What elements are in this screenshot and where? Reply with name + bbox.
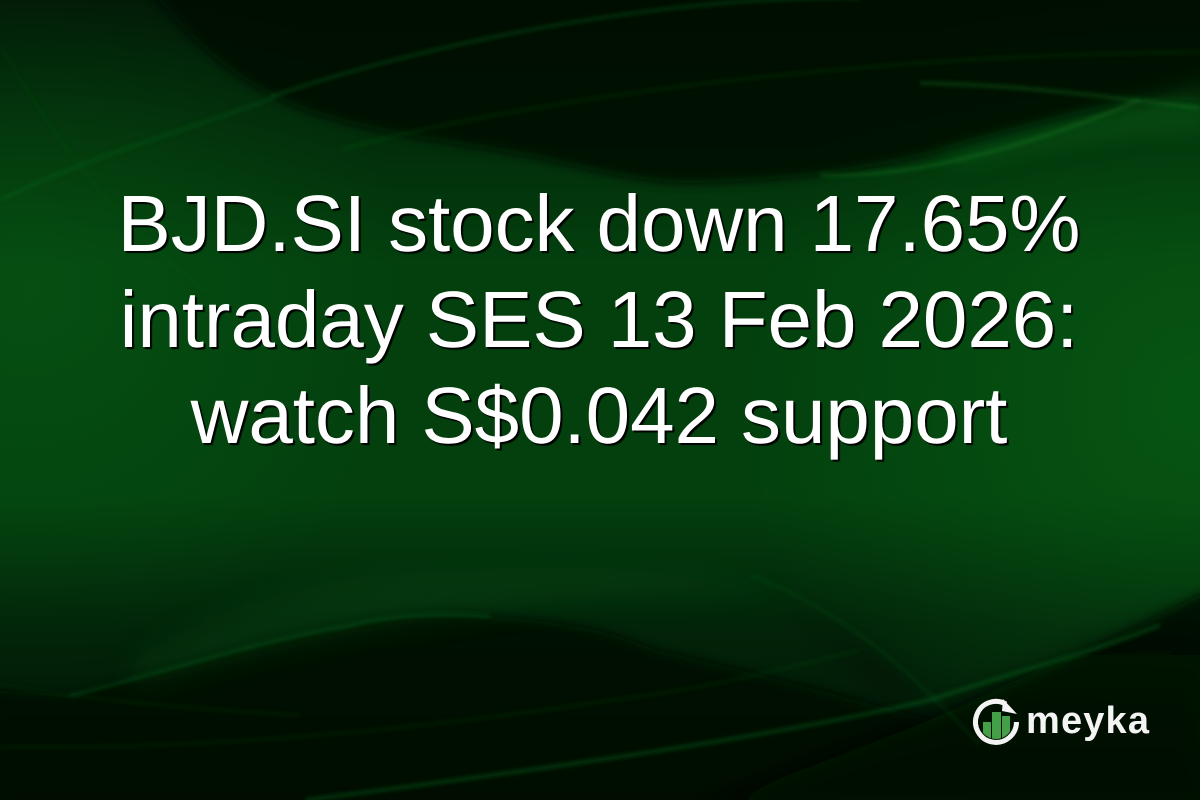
icon: ring with bars (976, 699, 1017, 742)
soft bright ribbon upper right (930, 80, 1200, 168)
title: BJD.SI stock down 17.65% (117, 179, 1080, 268)
soft ribbon above hump (130, 568, 780, 690)
title (117, 179, 1080, 462)
logo: meyka (972, 698, 1150, 745)
bottom dark hump (0, 590, 1200, 800)
lower right dark wedge (700, 590, 1200, 800)
wordmark: meyka (1026, 700, 1150, 742)
title: watch S$0.042 support (191, 371, 1007, 460)
top dark swoosh (150, 0, 1200, 183)
title: intraday SES 13 Feb 2026: (120, 275, 1078, 364)
